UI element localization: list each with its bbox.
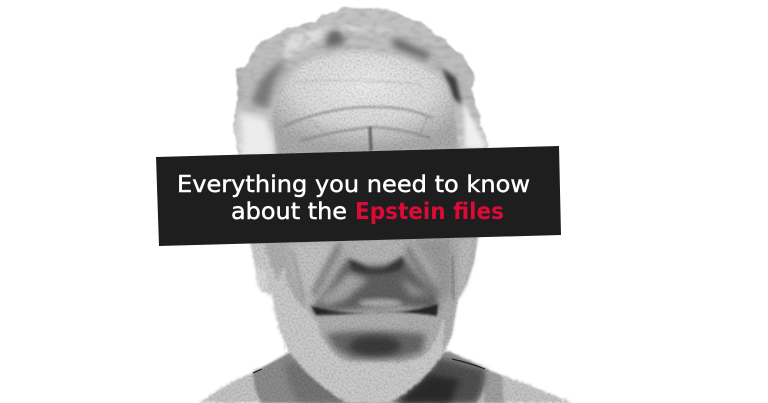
highlighted headline words: Epstein files	[355, 199, 504, 225]
chin shadow	[326, 331, 426, 358]
ear	[256, 265, 268, 292]
title banner: about the	[231, 199, 347, 225]
infographic canvas	[156, 6, 572, 403]
beard	[250, 243, 444, 403]
lower face	[251, 236, 478, 403]
upper lip	[358, 299, 402, 307]
headline: Everything you need to know	[177, 172, 530, 198]
nose	[342, 236, 408, 274]
lower lip	[322, 315, 410, 333]
skin grain	[199, 50, 574, 403]
banner bar	[156, 146, 561, 246]
hair highlights and shadows	[234, 8, 488, 154]
title banner	[156, 146, 561, 246]
moustache highlights	[318, 272, 368, 306]
photo: man's head with eyes covered	[199, 0, 574, 403]
shirt and shoulders	[199, 350, 572, 403]
hair	[233, 7, 488, 170]
forehead wrinkles	[284, 80, 432, 150]
cheeks and folds	[288, 238, 476, 312]
moustache	[313, 260, 438, 311]
mouth	[311, 304, 438, 316]
forehead	[272, 51, 458, 156]
